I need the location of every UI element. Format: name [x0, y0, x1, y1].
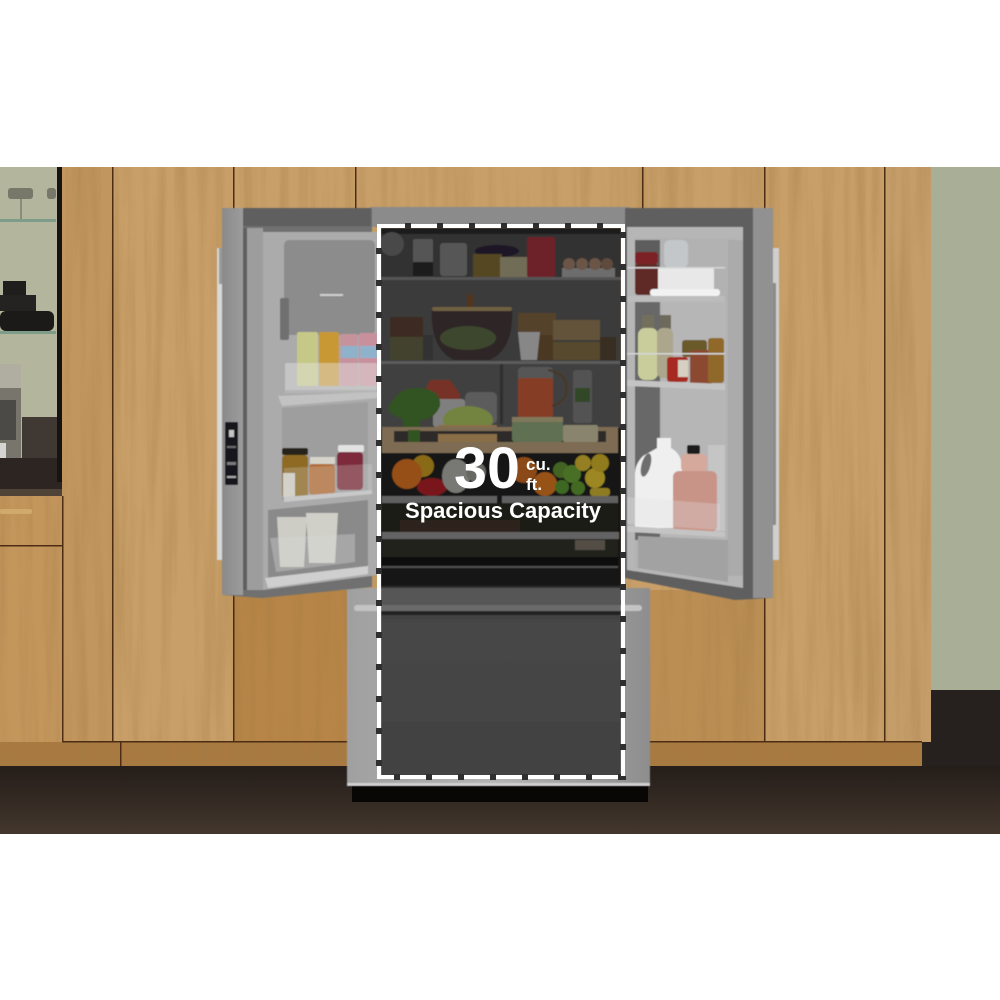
floor — [0, 766, 1000, 834]
middle shelf bottles — [638, 315, 673, 380]
third section — [381, 364, 621, 442]
interior dimming overlay — [381, 228, 621, 586]
middle shelf jars — [627, 338, 725, 385]
dashed capacity outline — [379, 226, 623, 777]
door bin — [627, 497, 720, 530]
shelf 1 — [381, 277, 621, 280]
door shell — [222, 208, 372, 598]
crisper drawers with produce — [382, 453, 618, 496]
glass wood shelf — [382, 417, 618, 453]
left door — [217, 208, 378, 598]
top shelf items — [627, 240, 725, 296]
cabinet joints — [0, 167, 922, 766]
lower compartment — [382, 503, 619, 586]
liner lower border — [265, 566, 368, 588]
exterior handle — [773, 248, 779, 560]
lower bin — [270, 534, 355, 572]
fridge floor shadow — [352, 786, 648, 802]
kitchen background — [0, 167, 1000, 834]
unit: cu.: cu. — [526, 455, 551, 474]
pink container — [673, 445, 717, 532]
door liner — [627, 227, 743, 588]
right door — [625, 208, 779, 600]
shelf 2 — [381, 361, 621, 364]
middle shelf jars — [282, 445, 364, 498]
upper shelf bin — [285, 363, 377, 393]
top section — [380, 228, 621, 278]
wood cabinetry — [0, 167, 931, 766]
door liner — [263, 232, 378, 590]
right dark base wall — [922, 690, 1000, 770]
unit: ft.: ft. — [526, 475, 542, 494]
upper shelf cans — [297, 332, 377, 386]
ice cream tubs — [277, 513, 338, 567]
caption: Spacious Capacity — [405, 498, 602, 523]
second section — [381, 280, 621, 362]
capacity number: 30 — [454, 436, 520, 501]
ice compartment — [280, 240, 375, 340]
milk jug — [635, 438, 682, 528]
left shelving niche — [0, 167, 63, 497]
top shelf ledge — [627, 296, 725, 302]
freezer drawer body — [347, 588, 650, 786]
exterior handle — [217, 248, 222, 560]
fresh food interior — [380, 228, 621, 602]
control display — [225, 422, 238, 485]
right wall — [931, 167, 1000, 692]
bottom shelf ledge — [627, 526, 725, 537]
tall pack — [708, 445, 725, 531]
middle cavity — [282, 402, 368, 500]
shelf ledge — [278, 392, 378, 406]
middle shelf bin — [284, 464, 372, 502]
capacity callout — [405, 436, 602, 523]
refrigerator — [217, 207, 779, 786]
lower liner recess — [638, 536, 728, 582]
left drawer pull — [0, 509, 32, 514]
crisper fronts — [382, 496, 618, 503]
fridge cabinet top — [370, 207, 630, 227]
door shell — [625, 208, 773, 600]
freezer front, darkened — [381, 586, 621, 776]
middle shelf ledge — [627, 380, 725, 390]
lower cavity — [268, 500, 368, 584]
